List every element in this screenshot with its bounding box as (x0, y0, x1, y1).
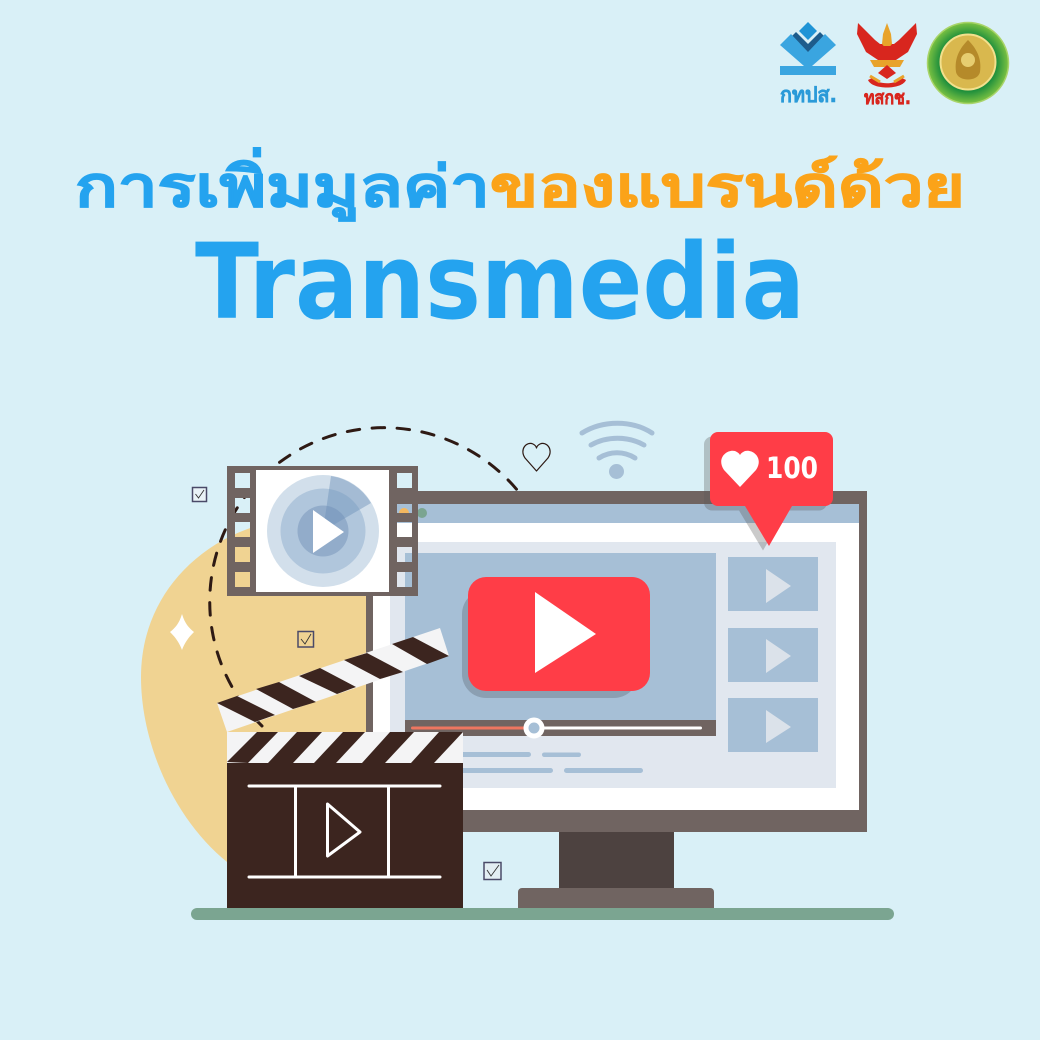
video area (405, 553, 716, 721)
icon: heart outline (523, 443, 550, 471)
sparkle (170, 614, 194, 650)
logo: TSRI chevrons (780, 22, 837, 107)
ground line (191, 908, 894, 920)
ochre background blob (141, 508, 368, 868)
clapper stripe band (227, 732, 463, 764)
play button (462, 577, 650, 698)
clapperboard (217, 628, 463, 908)
clapper arm (217, 628, 449, 732)
film strip (227, 466, 418, 596)
content panel (390, 542, 836, 788)
heart (721, 451, 759, 487)
check box 1 (192, 488, 206, 502)
monitor (366, 491, 867, 832)
icon: wifi (582, 423, 652, 479)
clapper body (227, 763, 463, 908)
logo: university seal (928, 22, 1008, 104)
caption lines (455, 752, 643, 773)
logo: Garuda emblem (857, 23, 917, 109)
title line 2: Transmedia (195, 221, 805, 343)
thumbnail 1 (728, 557, 818, 611)
illustration (141, 423, 894, 920)
thumbnail 3 (728, 698, 818, 752)
title (75, 147, 965, 343)
check box 3 (484, 862, 501, 880)
like notification bubble (704, 432, 833, 550)
check box 2 (298, 632, 314, 647)
player bar (405, 720, 716, 736)
count: 100 (766, 451, 818, 485)
thumbnail 2 (728, 628, 818, 682)
title line 1: การเพิ่มมูลค่า ของแบรนด์ด้วย (75, 147, 965, 222)
radial play icon (267, 475, 379, 587)
logo: TSRI chevrons: กทปส. (780, 83, 837, 107)
dashed arc (210, 428, 518, 726)
logo: Garuda emblem: ทสกช. (864, 87, 911, 109)
logos (780, 22, 1008, 109)
monitor stand (518, 830, 714, 908)
